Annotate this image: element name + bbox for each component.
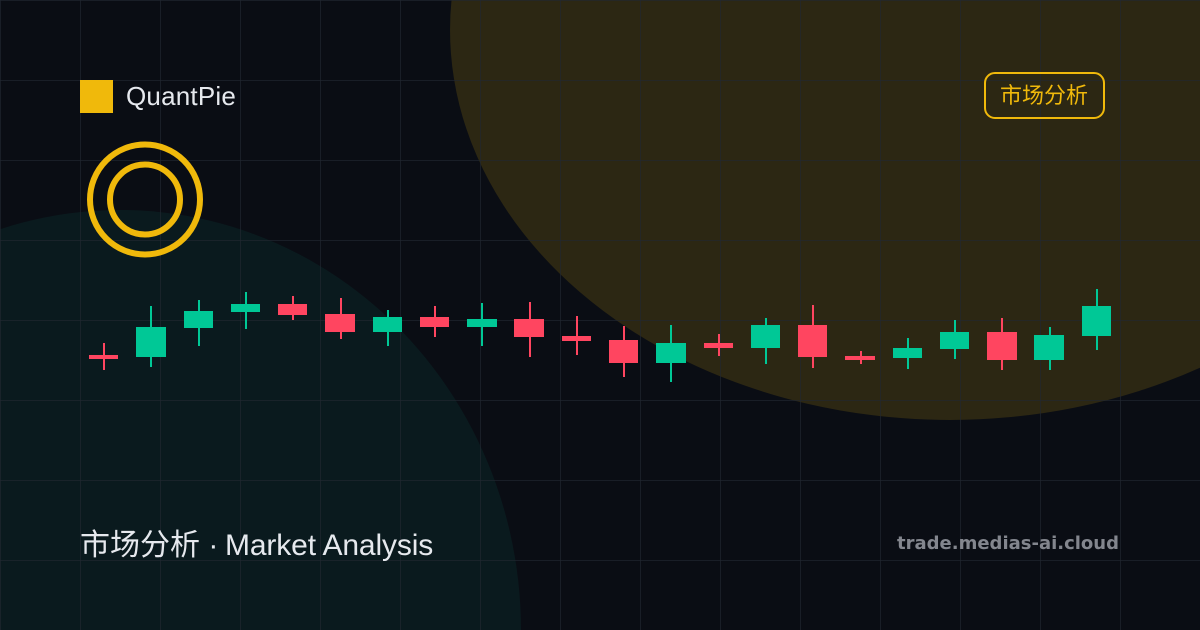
logo mark [80,80,113,113]
teal ellipse backdrop [0,210,521,630]
candle 12 [609,326,638,377]
candle 22 [1082,289,1111,350]
candle 2 [136,306,166,367]
candle 21 [1034,327,1064,370]
gold ellipse backdrop [450,0,1200,420]
candle 14 [704,334,733,356]
candle 7 [373,310,402,346]
brand name: QuantPie [126,81,236,111]
candle 4 [231,292,260,329]
title: Market Analysis [225,529,433,562]
candle 6 [325,298,355,339]
icon: concentric rings [90,144,200,254]
candle 13 [656,325,686,382]
candle 15 [751,318,780,364]
title: 市场分析 · [80,529,218,562]
url: trade.medias-ai.cloud [897,533,1119,554]
candle 10 [514,302,544,357]
candle 8 [420,306,449,337]
candle 1 [89,343,118,370]
candle 16 [798,305,827,368]
badge: 市场分析 [1000,83,1088,108]
candle 9 [467,303,497,346]
candlestick chart [89,289,1111,382]
candle 19 [940,320,969,359]
candle 17 [845,351,875,364]
badge [985,73,1104,118]
candle 5 [278,296,307,320]
candle 20 [987,318,1017,370]
candle 18 [893,338,922,369]
candle 3 [184,300,213,346]
candle 11 [562,316,591,355]
